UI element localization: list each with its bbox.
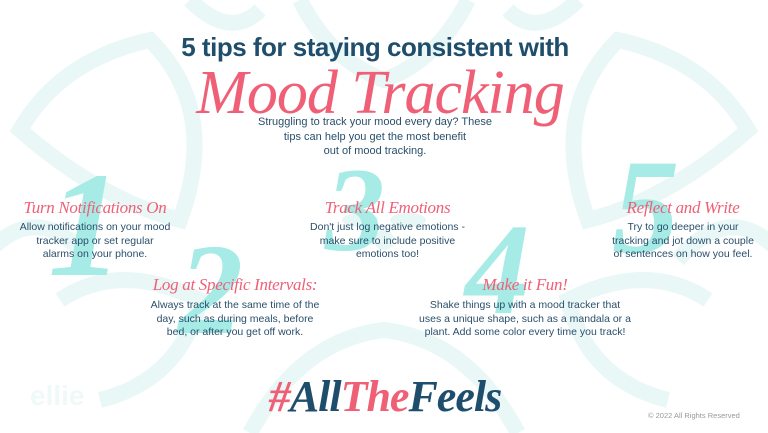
big number 2: 2 <box>178 218 243 362</box>
text: tip 5 <box>612 221 754 260</box>
text: tip 3: Don't just log negative emotions - <box>310 221 465 233</box>
text: tip 3: emotions too! <box>356 248 419 260</box>
text: tip 1: alarms on your phone. <box>43 248 147 260</box>
text: tip 3 <box>310 221 465 260</box>
big number 1: 1 <box>48 142 123 308</box>
heading: reflect and write: Reflect and Write <box>627 198 739 217</box>
big number 3: 3 <box>325 143 385 276</box>
text: tip 2: bed, or after you get off work. <box>167 326 303 338</box>
text: tip 3: make sure to include positive <box>320 234 455 246</box>
title: 5 tips for staying consistent with <box>181 32 569 62</box>
heading: track all emotions: Track All Emotions <box>325 198 450 217</box>
tip 4 <box>419 275 631 338</box>
big number 4: 4 <box>465 198 530 342</box>
logo: ellie <box>30 380 84 411</box>
tip 3 <box>310 198 465 260</box>
text: tip 4: uses a unique shape, such as a mandala or a <box>419 312 631 324</box>
text: tip 5: Try to go deeper in your <box>627 221 739 233</box>
subtitle <box>258 116 492 157</box>
text: tip 4: plant. Add some color every time you track! <box>425 326 625 338</box>
subtitle: Struggling to track your mood every day? These <box>258 116 492 128</box>
script title: Mood Tracking <box>196 59 564 127</box>
text: tip 5: of sentences on how you feel. <box>614 248 752 260</box>
tip 1 <box>20 198 170 260</box>
text: tip 1 <box>20 221 170 260</box>
text: tip 2 <box>150 299 319 338</box>
heading: turn notifications on: Turn Notifications On <box>24 198 166 217</box>
tip 2 <box>150 275 319 338</box>
text: tip 4 <box>419 299 631 338</box>
text: tip 4: Shake things up with a mood tracker that <box>430 299 620 311</box>
big number 5: 5 <box>612 133 680 282</box>
subtitle: out of mood tracking. <box>324 145 426 157</box>
copyright: © 2022 All Rights Reserved <box>648 411 740 420</box>
text: tip 1: tracker app or set regular <box>36 234 154 246</box>
text: tip 2: day, such as during meals, before <box>157 312 313 324</box>
text: tip 2: Always track at the same time of the <box>151 299 319 311</box>
text: tip 1: Allow notifications on your mood <box>20 221 170 233</box>
heading: make it fun: Make it Fun! <box>482 275 568 294</box>
heading: log at specific intervals: Log at Specific Intervals: <box>153 275 317 294</box>
hashtag: #AllTheFeels <box>269 372 501 421</box>
tip 5 <box>612 198 754 260</box>
text: tip 5: tracking and jot down a couple <box>612 234 754 246</box>
subtitle: tips can help you get the most benefit <box>284 130 466 142</box>
